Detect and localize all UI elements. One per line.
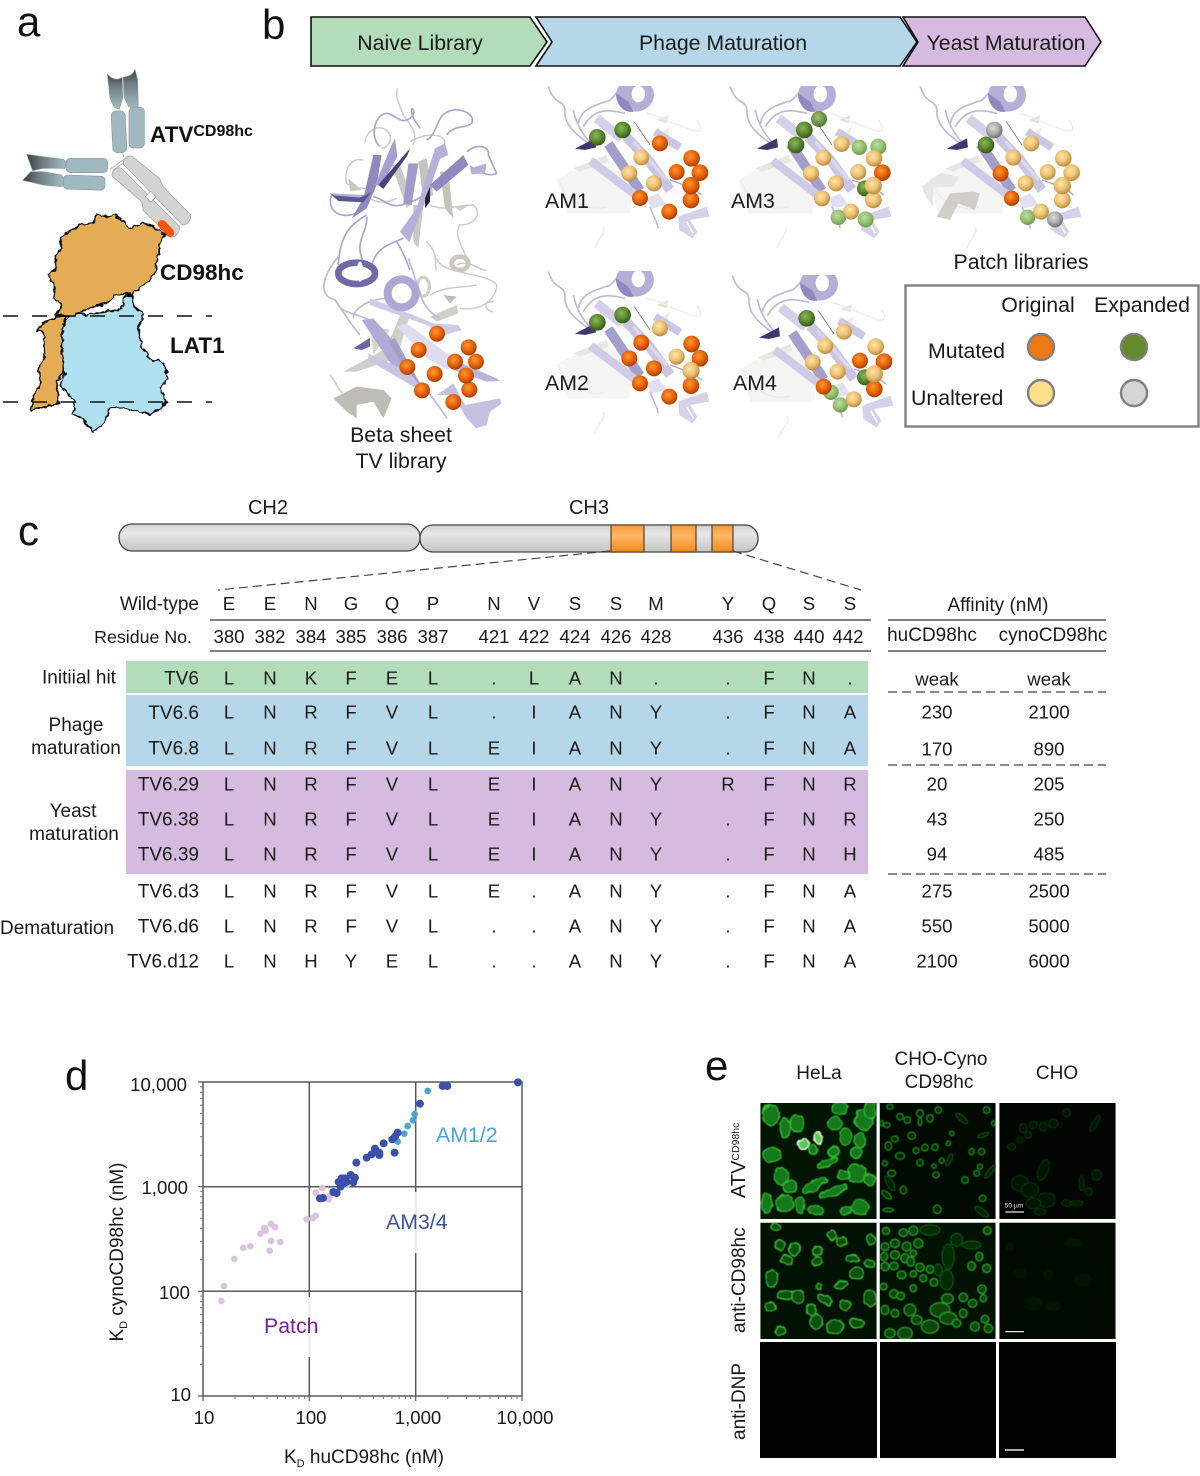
series labels: AM3/4 [386, 1210, 448, 1234]
residue sequences: 428 [640, 626, 672, 647]
row names: Residue No. [94, 627, 192, 647]
icon: CD98hc protein [32, 213, 166, 410]
x axis tick labels: 1,000 [395, 1407, 441, 1428]
caption: Patch libraries: Patch libraries [954, 250, 1088, 274]
row label anti-DNP: anti-DNP [729, 1363, 750, 1440]
residue sequences: EENGQPNVSSMYQSS [223, 593, 856, 614]
scale bar [1005, 1449, 1024, 1451]
structure: beta sheet TV library [324, 88, 502, 428]
affinity table: Affinity (nM) [947, 595, 1049, 616]
scatter: patch [218, 1182, 350, 1304]
residue sequences: LNRFVLE.ANY.FNA [224, 880, 857, 902]
group labels: Initiial hit [42, 668, 117, 688]
row names: TV6.d3 [138, 882, 199, 902]
residue sequences: 387 [417, 626, 449, 647]
y axis tick labels: 10,000 [130, 1074, 187, 1095]
series labels: AM1/2 [436, 1123, 498, 1147]
residue sequences: LNRFVLEIANY.FNH [224, 844, 857, 864]
row names: TV6.39 [138, 844, 199, 866]
image: HeLa ATV [760, 1101, 877, 1219]
affinity table: 550 [921, 916, 953, 936]
structure: AM1 [548, 76, 709, 248]
row names: TV6.8 [148, 738, 199, 760]
row names: TV6.6 [148, 703, 199, 724]
scatter: AM1/2 [394, 1088, 431, 1145]
group labels: Dematuration [0, 918, 114, 939]
residue sequences: 422 [518, 626, 550, 647]
residue sequences: 442 [832, 626, 864, 647]
x axis tick labels: 10,000 [497, 1407, 553, 1428]
labels: AM variants: AM3 [731, 189, 775, 213]
banner: Yeast Maturation [903, 17, 1101, 66]
row names: TV6 [164, 668, 199, 690]
x axis tick labels: 10 [194, 1407, 214, 1428]
residue sequences: 380 [213, 626, 245, 647]
x axis tick labels: 100 [295, 1407, 327, 1428]
structure: AM3 [730, 76, 891, 248]
affinity table [887, 595, 1107, 972]
column headers: CD98hc [905, 1072, 973, 1093]
affinity table: 43 [927, 808, 947, 830]
group labels: Yeast [50, 801, 97, 822]
affinity table: 230 [921, 702, 953, 722]
residue sequences: 438 [753, 626, 785, 647]
affinity table: 2100 [1028, 702, 1070, 722]
scale bar [1005, 1331, 1024, 1332]
row names: TV6.d12 [127, 952, 199, 972]
panel d: KD scatter plot [65, 1052, 553, 1470]
banner: Phage Maturation: Phage Maturation [639, 31, 807, 55]
affinity table: weak [914, 668, 959, 690]
row names: TV6.38 [138, 810, 199, 830]
domain labels CH2 CH3: CH3 [569, 497, 609, 519]
image: HeLa anti-CD98hc [760, 1223, 877, 1339]
banner: Naive Library [311, 17, 547, 66]
y axis title: K [107, 1329, 128, 1342]
icon: LAT1 protein [60, 295, 168, 432]
affinity table: 2500 [1028, 880, 1070, 902]
affinity table: 2100 [916, 950, 958, 972]
panel letter b: b [262, 1, 285, 48]
row label ATV: ATV [728, 1161, 750, 1198]
legend: Unaltered [911, 386, 1003, 410]
y axis title: cynoCD98hc (nM) [107, 1162, 128, 1321]
column headers: CHO [1036, 1063, 1078, 1084]
affinity table: 890 [1033, 738, 1065, 760]
series labels: Patch [264, 1314, 318, 1338]
affinity table: 6000 [1028, 950, 1070, 972]
scale bar 50 μm: 50 µm [1005, 1203, 1024, 1210]
group labels: Phage [49, 715, 103, 736]
group labels: maturation [29, 824, 119, 845]
affinity table: 250 [1033, 808, 1065, 830]
column headers: HeLa [796, 1063, 842, 1084]
panel b: library progression [262, 1, 1198, 473]
affinity table: 5000 [1028, 916, 1070, 936]
affinity table: 485 [1033, 844, 1065, 864]
labels: AM variants: AM4 [733, 371, 777, 395]
image: anti-DNP row [760, 1342, 1116, 1458]
residue sequences: 386 [376, 626, 408, 647]
panel letter d: d [65, 1052, 88, 1099]
affinity table: 275 [921, 880, 953, 902]
icon: antibody ATV [23, 69, 191, 237]
residue sequences: 424 [559, 626, 591, 647]
affinity table: cynoCD98hc [999, 625, 1107, 646]
residue sequences [213, 593, 864, 972]
label ATV: CD98hc [193, 123, 253, 140]
domain labels CH2 CH3 [248, 497, 609, 519]
x axis title: huCD98hc (nM) [305, 1447, 444, 1468]
labels: AM variants: AM1 [545, 189, 589, 213]
residue sequences: LNRFVLEIANY.FNR [224, 808, 857, 830]
affinity table: huCD98hc [887, 625, 977, 646]
label CD98hc: CD98hc [160, 260, 244, 285]
panel letter e: e [705, 1042, 728, 1089]
affinity table: 170 [921, 738, 953, 760]
row names: Wild-type [120, 594, 199, 615]
panel c: sequence table [0, 497, 1107, 972]
residue sequences: 385 [335, 626, 367, 647]
structure: AM2 [548, 261, 709, 433]
row names [94, 594, 199, 972]
legend: Original [1001, 293, 1075, 317]
legend [906, 286, 1198, 426]
y axis tick labels: 1,000 [141, 1177, 188, 1198]
residue sequences: 436 [712, 626, 744, 647]
residue sequences: 382 [254, 626, 286, 647]
structure: patch libraries [920, 76, 1081, 248]
y axis tick labels [130, 1074, 191, 1405]
image: CHO ATV [999, 1103, 1116, 1219]
header rules [210, 620, 1106, 651]
row bands [126, 661, 868, 874]
row names: TV6.29 [138, 774, 199, 796]
series labels [264, 1123, 498, 1338]
residue sequences: LNHYEL..ANY.FNA [224, 950, 857, 972]
residue sequences: 426 [600, 626, 632, 647]
banner: Yeast Maturation: Yeast Maturation [926, 31, 1086, 55]
caption: Beta sheet TV library [350, 423, 452, 473]
label LAT1: LAT1 [170, 333, 225, 358]
affinity table: 20 [927, 774, 947, 794]
panel a: ATV bound to CD98hc/LAT1 [3, 0, 253, 432]
x axis title: D [297, 1458, 305, 1470]
image: CHO-Cyno anti-CD98hc [880, 1223, 996, 1339]
residue sequences: LNRFVL..ANY.FNA [224, 916, 857, 936]
legend: Expanded [1094, 293, 1190, 317]
membrane dashed lines [3, 316, 212, 402]
labels: AM variants: AM2 [545, 371, 589, 395]
plot grid and axes [198, 1082, 522, 1401]
caption: Beta sheet TV library: TV library [355, 449, 447, 473]
legend: Mutated [928, 339, 1005, 363]
panel letter c: c [18, 507, 39, 554]
affinity table: weak [1026, 668, 1071, 690]
row label ATV: CD98hc [730, 1123, 742, 1161]
row label anti-CD98hc: anti-CD98hc [729, 1227, 750, 1333]
y axis tick labels: 10 [170, 1384, 191, 1405]
image: CHO anti-CD98hc [999, 1223, 1116, 1339]
structure: AM4 [732, 265, 893, 437]
residue sequences: LNRFVLEIANY.FNA [224, 738, 857, 758]
residue sequences: 440 [793, 626, 825, 647]
domain bar CH2/CH3 with orange patches [119, 524, 861, 590]
residue sequences: 384 [295, 626, 327, 647]
y axis tick labels: 100 [159, 1282, 190, 1303]
y axis title: D [118, 1321, 130, 1329]
residue sequences: LNRFVL.IANY.FNA [224, 702, 857, 722]
image: CHO-Cyno ATV [880, 1103, 997, 1219]
banner: Naive Library: Naive Library [357, 31, 483, 55]
caption: Beta sheet TV library: Beta sheet [350, 423, 452, 447]
x axis title: K [284, 1447, 297, 1468]
column headers [796, 1049, 1078, 1093]
x axis tick labels [194, 1407, 553, 1428]
group labels: maturation [31, 738, 121, 759]
row names: TV6.d6 [138, 916, 199, 938]
group labels [0, 668, 121, 939]
scatter: AM3/4 [316, 1078, 522, 1202]
labels: AM variants [545, 189, 777, 395]
column headers: CHO-Cyno [895, 1049, 987, 1070]
affinity table: 205 [1033, 774, 1065, 794]
banner: Phage Maturation [536, 17, 917, 66]
residue sequences: LNKFEL.LAN..FN. [224, 668, 853, 688]
residue sequences: LNRFVLEIANYRFNR [224, 774, 857, 794]
label ATV: ATV [150, 122, 193, 147]
panel e: microscopy grid [705, 1042, 1116, 1458]
residue sequences: 421 [478, 626, 510, 647]
domain labels CH2 CH3: CH2 [248, 497, 288, 519]
affinity table: 94 [927, 844, 947, 864]
